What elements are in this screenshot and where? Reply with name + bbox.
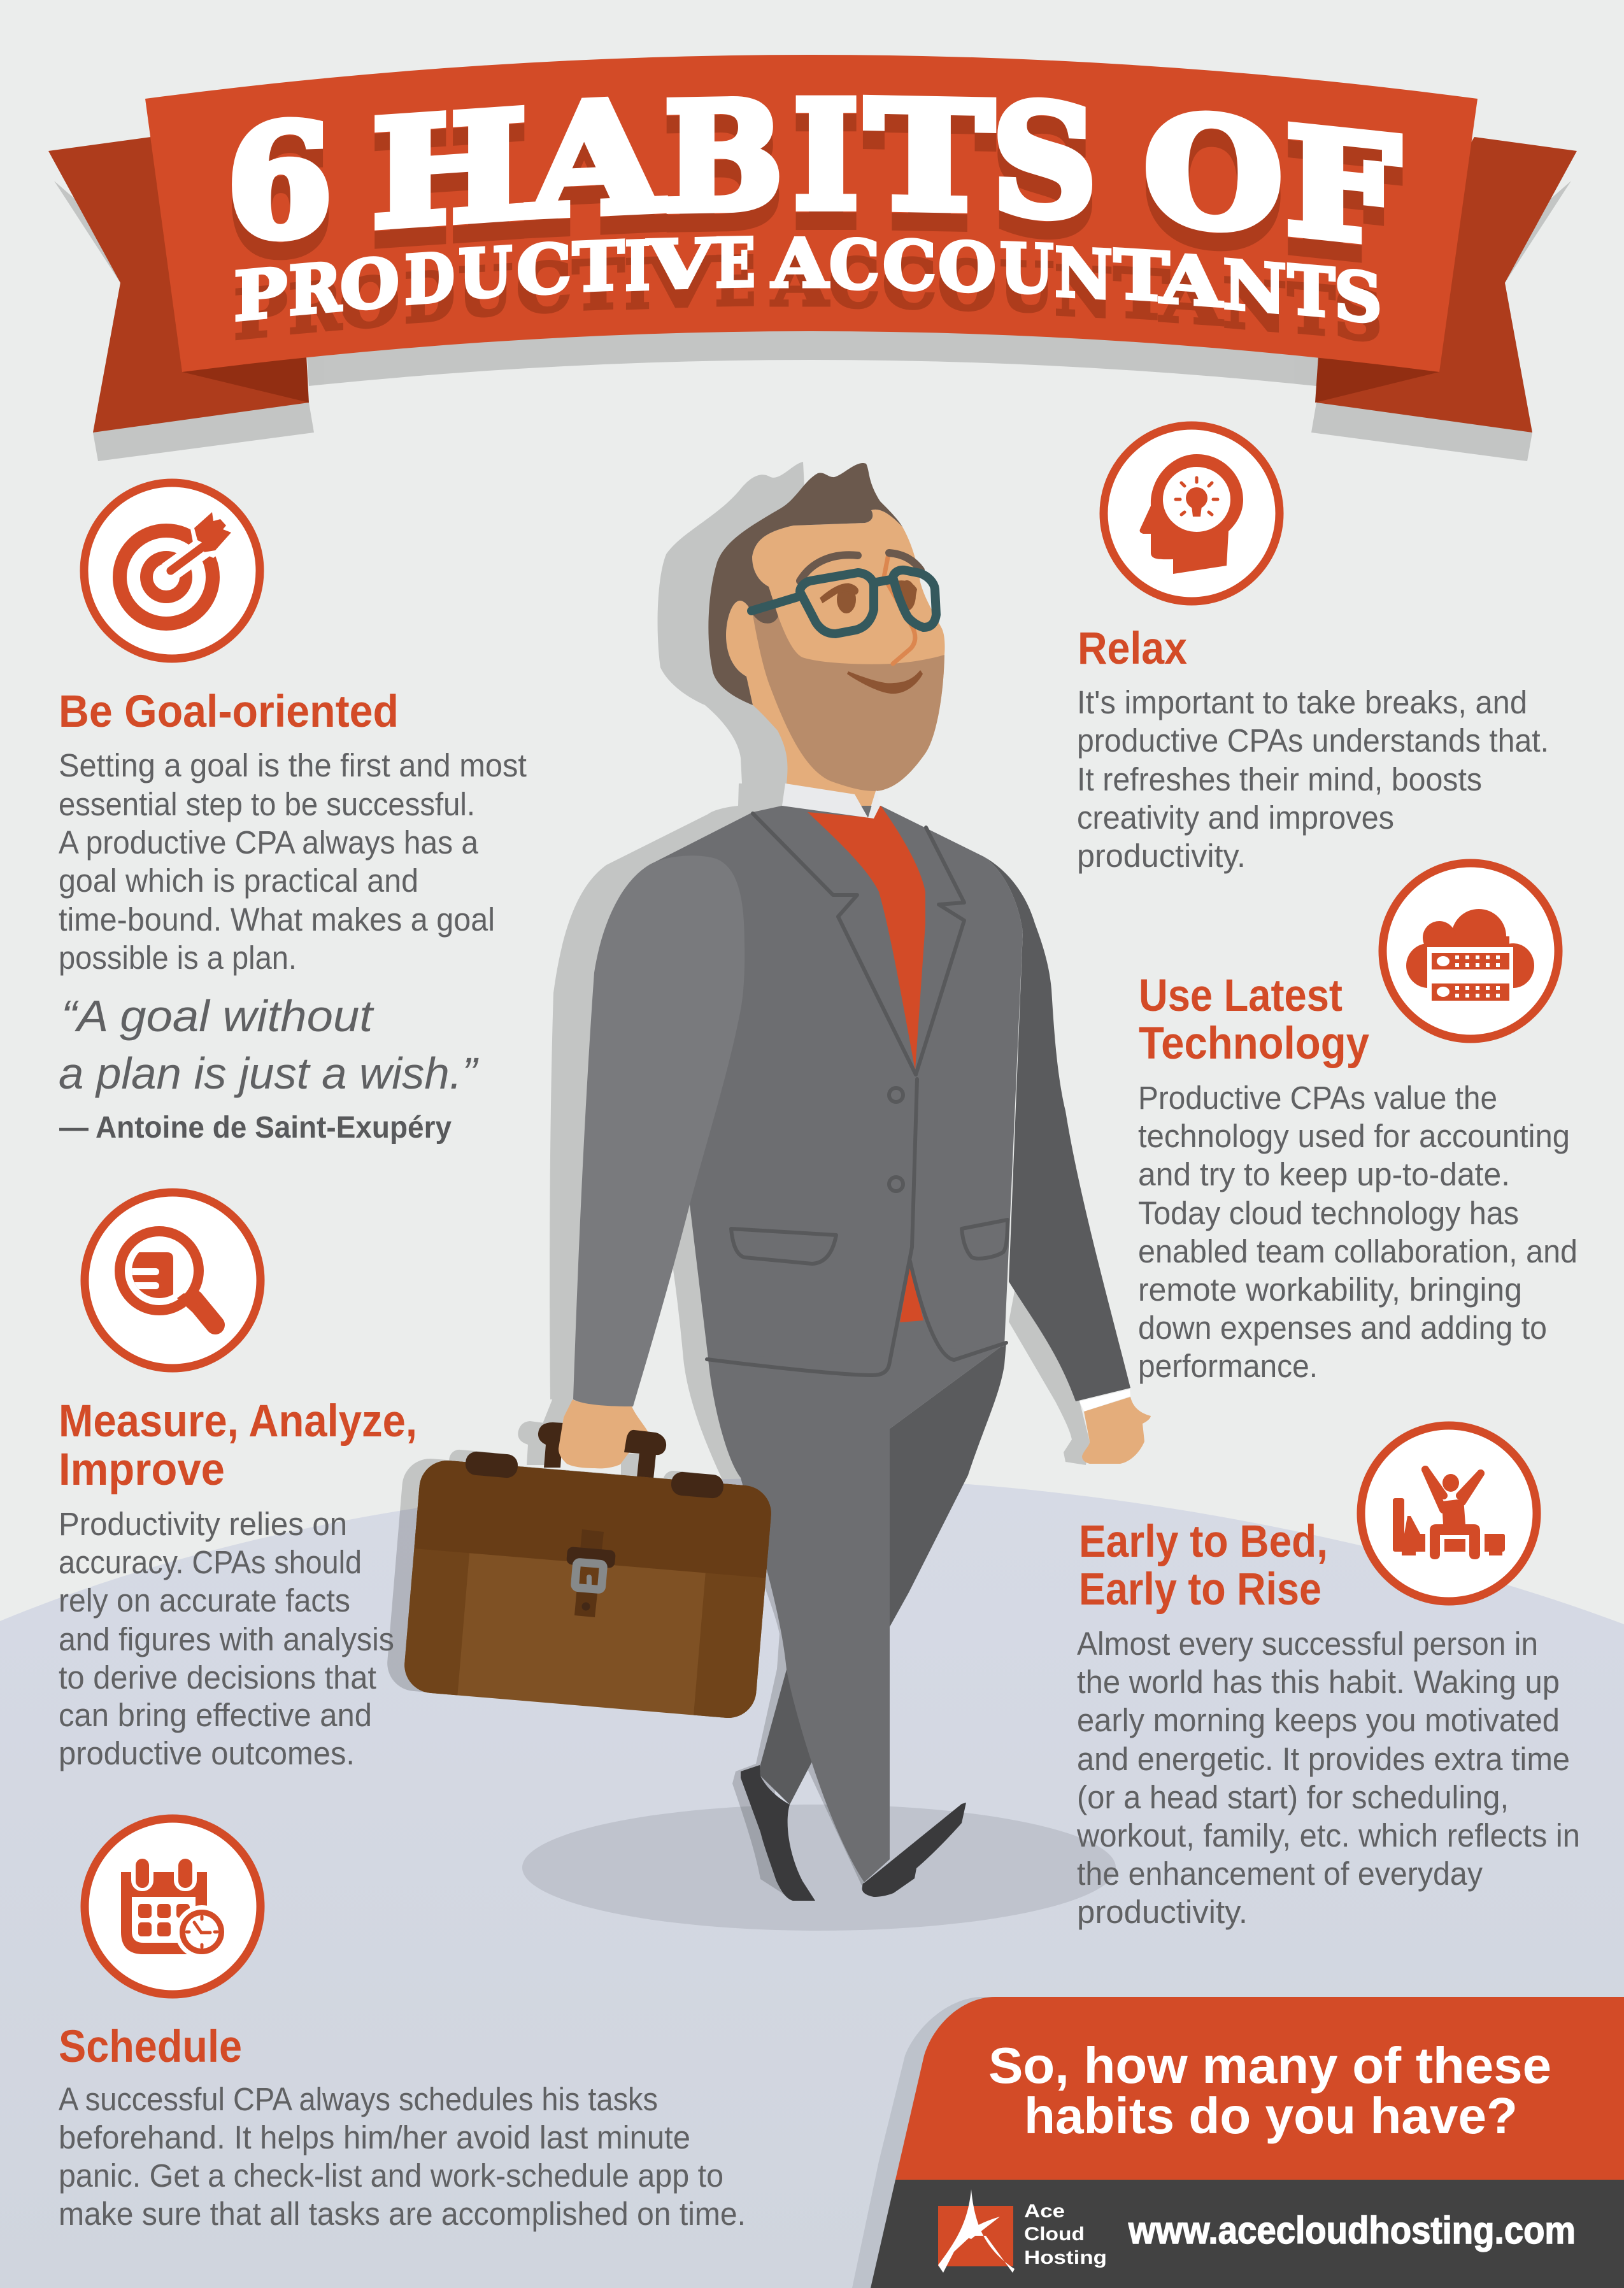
title line 2: N bbox=[1055, 232, 1113, 315]
heading: Measure: Measure, Analyze, bbox=[59, 1396, 417, 1447]
text: early body bbox=[1076, 1626, 1580, 1930]
back shoe bbox=[741, 1765, 815, 1901]
icon: person rising from bed bbox=[1361, 1426, 1537, 1601]
text: schedule body: make sure that all tasks are accomplished on time. bbox=[59, 2196, 746, 2232]
title line 2: D bbox=[404, 238, 455, 320]
text: goal body bbox=[59, 747, 527, 976]
title line 2: N bbox=[1223, 245, 1286, 329]
title line 1: F bbox=[1285, 96, 1400, 279]
text: technology body: Productive CPAs value the bbox=[1138, 1080, 1497, 1116]
mouth bbox=[847, 670, 923, 694]
panel shadow bbox=[852, 1997, 995, 2288]
title line 2 bbox=[234, 223, 1382, 339]
title line 2: C bbox=[829, 225, 880, 304]
title line 2: R bbox=[288, 247, 342, 331]
text: measure body: can bring effective and bbox=[59, 1697, 372, 1733]
website url: www.acecloudhosting.com bbox=[1128, 2209, 1576, 2252]
text: goal body: time-bound. What makes a goal bbox=[59, 901, 495, 938]
text: relax body: productivity. bbox=[1077, 838, 1246, 874]
shirt lower bbox=[900, 1264, 923, 1322]
text: measure body: Productivity relies on bbox=[59, 1506, 347, 1542]
title line 2: T bbox=[1288, 250, 1335, 332]
title line 2: P bbox=[234, 252, 287, 336]
text: relax body: productive CPAs understands that. bbox=[1077, 722, 1549, 759]
text: technology body bbox=[1138, 1080, 1578, 1384]
logo bbox=[938, 2189, 1015, 2273]
logo text: Hosting bbox=[1024, 2247, 1107, 2268]
call to action panel bbox=[852, 1997, 1624, 2288]
right handle bbox=[624, 1430, 666, 1479]
nose bbox=[884, 554, 915, 664]
text: measure body: to derive decisions that bbox=[59, 1659, 376, 1696]
right hand bbox=[1082, 1397, 1151, 1464]
title line 2: A bbox=[771, 224, 829, 303]
text: measure body: productive outcomes. bbox=[59, 1735, 355, 1771]
text: schedule body: A successful CPA always schedules his tasks bbox=[59, 2081, 658, 2117]
text: technology body: Today cloud technology has bbox=[1138, 1195, 1519, 1231]
briefcase top pads bbox=[465, 1450, 518, 1479]
title line 2: O bbox=[938, 227, 996, 307]
heading: Relax: Relax bbox=[1078, 624, 1187, 674]
glasses bbox=[751, 570, 936, 634]
title line 1: I bbox=[794, 69, 858, 242]
title line 2: T bbox=[573, 226, 624, 307]
quote: — Antoine de Saint-Exupéry bbox=[59, 1111, 452, 1145]
heading: Early to Bed bbox=[1079, 1517, 1328, 1615]
heading: Measure: Improve bbox=[59, 1445, 225, 1495]
text: measure body: accuracy. CPAs should bbox=[59, 1544, 362, 1580]
title line 2: C bbox=[883, 225, 936, 305]
text: early body: the enhancement of everyday bbox=[1077, 1855, 1483, 1892]
title line 2: I bbox=[625, 226, 650, 306]
beard bbox=[753, 615, 944, 791]
title line 1: O bbox=[1144, 82, 1283, 266]
briefcase bbox=[398, 1450, 780, 1728]
front shoe bbox=[862, 1803, 966, 1897]
right ribbon tail bbox=[1316, 137, 1577, 433]
text: schedule body bbox=[59, 2081, 746, 2232]
text: relax body: creativity and improves bbox=[1077, 799, 1394, 836]
briefcase body bbox=[404, 1461, 771, 1718]
text: measure body: rely on accurate facts bbox=[59, 1582, 350, 1619]
call to action text: habits do you have? bbox=[1024, 2087, 1518, 2144]
icon: head with bulb bbox=[1104, 425, 1279, 601]
title line 2: E bbox=[715, 223, 755, 303]
banner shadow bbox=[54, 181, 1571, 461]
text: technology body: enabled team collaboration, and bbox=[1138, 1233, 1578, 1269]
title line 1: B bbox=[664, 69, 783, 245]
text: early body: productivity. bbox=[1077, 1894, 1248, 1930]
text: schedule body: beforehand. It helps him/her avoid last minute bbox=[59, 2119, 690, 2156]
text: goal body: goal which is practical and bbox=[59, 862, 418, 899]
title line 2: U bbox=[1000, 228, 1053, 309]
right cuff bbox=[1079, 1389, 1130, 1412]
call to action text: So, how many of these bbox=[988, 2037, 1551, 2094]
right ribbon fold bbox=[1315, 318, 1439, 403]
text: early body: early morning keeps you motivated bbox=[1077, 1702, 1560, 1738]
title line 1 bbox=[227, 67, 1400, 279]
title line 2: A bbox=[1160, 239, 1223, 322]
text: technology body: technology used for accounting bbox=[1138, 1118, 1570, 1154]
hill bbox=[0, 1478, 1624, 2288]
panel red bbox=[895, 1997, 1624, 2180]
character bbox=[398, 463, 1151, 1901]
eyebrows bbox=[800, 553, 921, 581]
title line 2: T bbox=[1114, 234, 1169, 317]
text: measure body bbox=[59, 1506, 394, 1771]
logo text bbox=[1024, 2201, 1107, 2268]
shirt bbox=[808, 806, 925, 1070]
title line 2: V bbox=[647, 224, 715, 304]
back leg bbox=[760, 1670, 814, 1805]
quote bbox=[59, 991, 479, 1145]
text: early body: Almost every successful person in bbox=[1077, 1626, 1538, 1662]
text: goal body: possible is a plan. bbox=[59, 940, 297, 976]
title line 2: C bbox=[516, 229, 571, 310]
text: technology body: and try to keep up-to-date. bbox=[1138, 1156, 1510, 1192]
hair bbox=[708, 463, 902, 705]
heading: Be Goal-oriented: Be Goal-oriented bbox=[59, 687, 399, 737]
ground shadow bbox=[522, 1805, 1116, 1931]
panel dark bbox=[871, 2180, 1624, 2288]
jacket lines bbox=[707, 813, 1008, 1375]
title line 1: S bbox=[992, 70, 1097, 253]
text: early body: (or a head start) for scheduling, bbox=[1077, 1779, 1509, 1815]
text: technology body: remote workability, bringing bbox=[1138, 1271, 1522, 1308]
text: technology body: down expenses and adding to bbox=[1138, 1310, 1547, 1346]
logo text: Cloud bbox=[1024, 2224, 1085, 2245]
left sleeve bbox=[573, 855, 744, 1406]
quote: “A goal without bbox=[61, 991, 374, 1041]
logo text: Ace bbox=[1024, 2201, 1065, 2222]
text: early body: workout, family, etc. which reflects in bbox=[1076, 1817, 1580, 1854]
call to action text bbox=[988, 2037, 1551, 2144]
left hand bbox=[559, 1399, 648, 1468]
title bbox=[227, 67, 1400, 339]
briefcase clasp bbox=[566, 1529, 616, 1617]
jacket body bbox=[649, 806, 1023, 1359]
icon: magnifier bbox=[85, 1192, 260, 1368]
title line 1: A bbox=[529, 67, 664, 252]
left ribbon tail bbox=[48, 137, 309, 433]
heading: Schedule: Schedule bbox=[59, 2022, 242, 2072]
icon: cloud server bbox=[1383, 863, 1558, 1039]
trouser shade bbox=[890, 1343, 1006, 1627]
icon: calendar bbox=[85, 1819, 260, 1994]
neck and face bbox=[726, 510, 944, 822]
quote: a plan is just a wish.” bbox=[59, 1048, 479, 1098]
heading: Early to Bed: Early to Bed, bbox=[1079, 1517, 1328, 1567]
banner bbox=[48, 55, 1577, 461]
ribbon main bbox=[145, 55, 1478, 372]
text: relax body: It's important to take breaks, and bbox=[1077, 684, 1527, 720]
title line 1: T bbox=[866, 68, 993, 245]
title line 2: S bbox=[1334, 255, 1382, 339]
title line 2: O bbox=[340, 242, 399, 326]
eyes bbox=[821, 580, 917, 613]
heading: Early to Bed: Early to Rise bbox=[1079, 1564, 1321, 1615]
text: technology body: performance. bbox=[1138, 1348, 1318, 1384]
heading: Measure bbox=[59, 1396, 417, 1495]
heading: Use Latest Technology: Use Latest bbox=[1139, 971, 1343, 1021]
text: relax body: It refreshes their mind, boosts bbox=[1077, 761, 1482, 797]
text: early body: the world has this habit. Waking up bbox=[1077, 1664, 1560, 1700]
heading: Use Latest Technology bbox=[1139, 971, 1369, 1069]
title line 2: U bbox=[459, 232, 512, 314]
right sleeve bbox=[984, 857, 1130, 1401]
heading: Use Latest Technology: Technology bbox=[1139, 1019, 1369, 1069]
collar bbox=[782, 783, 880, 819]
text: schedule body: panic. Get a check-list and work-schedule app to bbox=[59, 2157, 723, 2194]
title line 1: 6 bbox=[227, 90, 332, 273]
title line 1: H bbox=[372, 80, 527, 261]
text: goal body: A productive CPA always has a bbox=[59, 824, 479, 861]
icon: target bbox=[84, 483, 260, 659]
text: relax body bbox=[1077, 684, 1549, 874]
character shadow bbox=[385, 462, 1090, 1901]
text: goal body: Setting a goal is the first and most bbox=[59, 747, 527, 783]
text: goal body: essential step to be successful. bbox=[59, 786, 475, 822]
text: early body: and energetic. It provides extra time bbox=[1077, 1741, 1570, 1777]
text: measure body: and figures with analysis bbox=[59, 1621, 394, 1657]
trousers bbox=[708, 1343, 1006, 1882]
left ribbon fold bbox=[182, 318, 309, 403]
left handle post bbox=[538, 1422, 564, 1468]
